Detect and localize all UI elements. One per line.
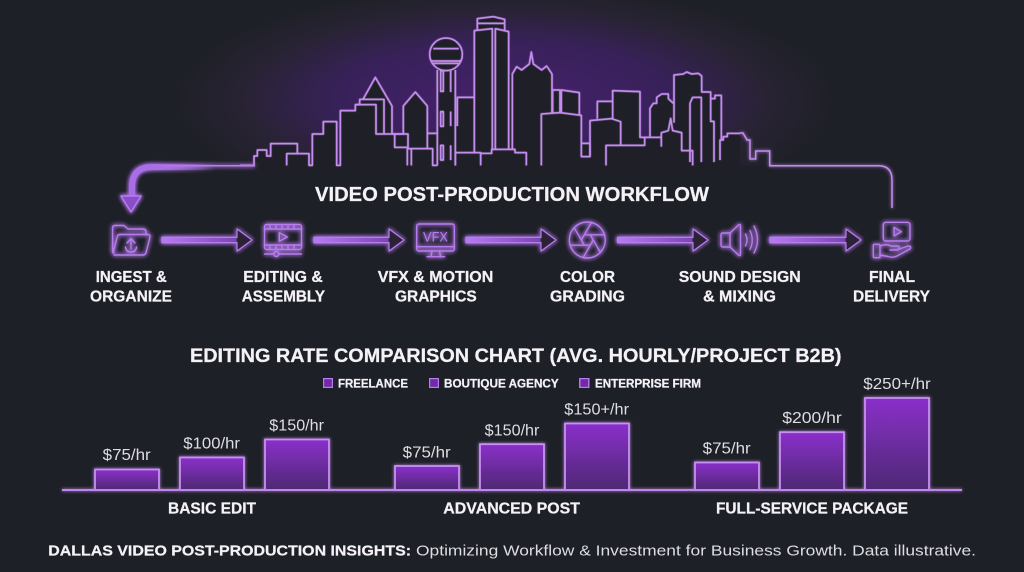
step labels bbox=[90, 269, 930, 306]
step labels: VFX & MOTION bbox=[378, 269, 493, 286]
icon: hand delivering video bbox=[873, 222, 911, 258]
icon: aperture bbox=[569, 222, 605, 258]
bar chart: $100/hr bbox=[183, 436, 241, 453]
bar chart: $150/hr bbox=[269, 418, 325, 435]
return line from delivery over the skyline bbox=[740, 133, 892, 208]
footer insight line: Optimizing Workflow & Investment for Business Growth. Data illustrative. bbox=[416, 543, 976, 560]
chart legend: BOUTIQUE AGENCY bbox=[444, 379, 559, 391]
chart legend bbox=[324, 378, 701, 391]
bar chart: $150+/hr bbox=[564, 401, 630, 418]
return arrow into ingest bbox=[121, 166, 255, 212]
chart legend: FREELANCE bbox=[338, 379, 408, 391]
bar chart: $75/hr bbox=[703, 440, 751, 457]
bar chart: BASIC EDIT bbox=[168, 500, 256, 517]
bar chart: $150/hr bbox=[485, 422, 540, 439]
footer insight line bbox=[48, 543, 976, 560]
step labels: GRAPHICS bbox=[395, 289, 477, 306]
step labels: COLOR bbox=[560, 269, 615, 286]
step labels: SOUND DESIGN bbox=[679, 269, 801, 286]
step labels: GRADING bbox=[550, 289, 625, 306]
step labels: FINAL bbox=[869, 269, 915, 286]
background glow behind skyline bbox=[170, 0, 840, 166]
heading: rate chart: EDITING RATE COMPARISON CHART (AVG. HOURLY/PROJECT B2B) bbox=[190, 345, 842, 367]
step labels: ORGANIZE bbox=[90, 289, 172, 306]
step labels: ASSEMBLY bbox=[242, 289, 325, 306]
bar chart: $75/hr bbox=[103, 447, 151, 464]
workflow arrows bbox=[162, 229, 861, 251]
bar chart: $250+/hr bbox=[863, 376, 931, 393]
bar chart: $75/hr bbox=[403, 444, 451, 461]
step labels: EDITING & bbox=[243, 269, 323, 286]
bar chart: ADVANCED POST bbox=[443, 500, 580, 517]
bar chart: FULL-SERVICE PACKAGE bbox=[716, 500, 908, 517]
bar chart: $200/hr bbox=[782, 410, 842, 427]
icon: speaker bbox=[721, 224, 758, 256]
bar chart bbox=[62, 376, 962, 517]
step labels: & MIXING bbox=[703, 289, 776, 306]
footer insight line: DALLAS VIDEO POST-PRODUCTION INSIGHTS: bbox=[48, 543, 411, 560]
step labels: DELIVERY bbox=[853, 289, 930, 306]
icon: VFX monitor bbox=[417, 224, 454, 257]
icon: film strip bbox=[264, 224, 302, 256]
chart legend: ENTERPRISE FIRM bbox=[595, 379, 701, 391]
icon: folder upload bbox=[113, 226, 150, 255]
icon: VFX monitor: VFX bbox=[423, 229, 449, 245]
title: workflow: VIDEO POST-PRODUCTION WORKFLOW bbox=[315, 183, 710, 206]
skyline of Dallas bbox=[220, 17, 740, 173]
step labels: INGEST & bbox=[96, 269, 167, 286]
